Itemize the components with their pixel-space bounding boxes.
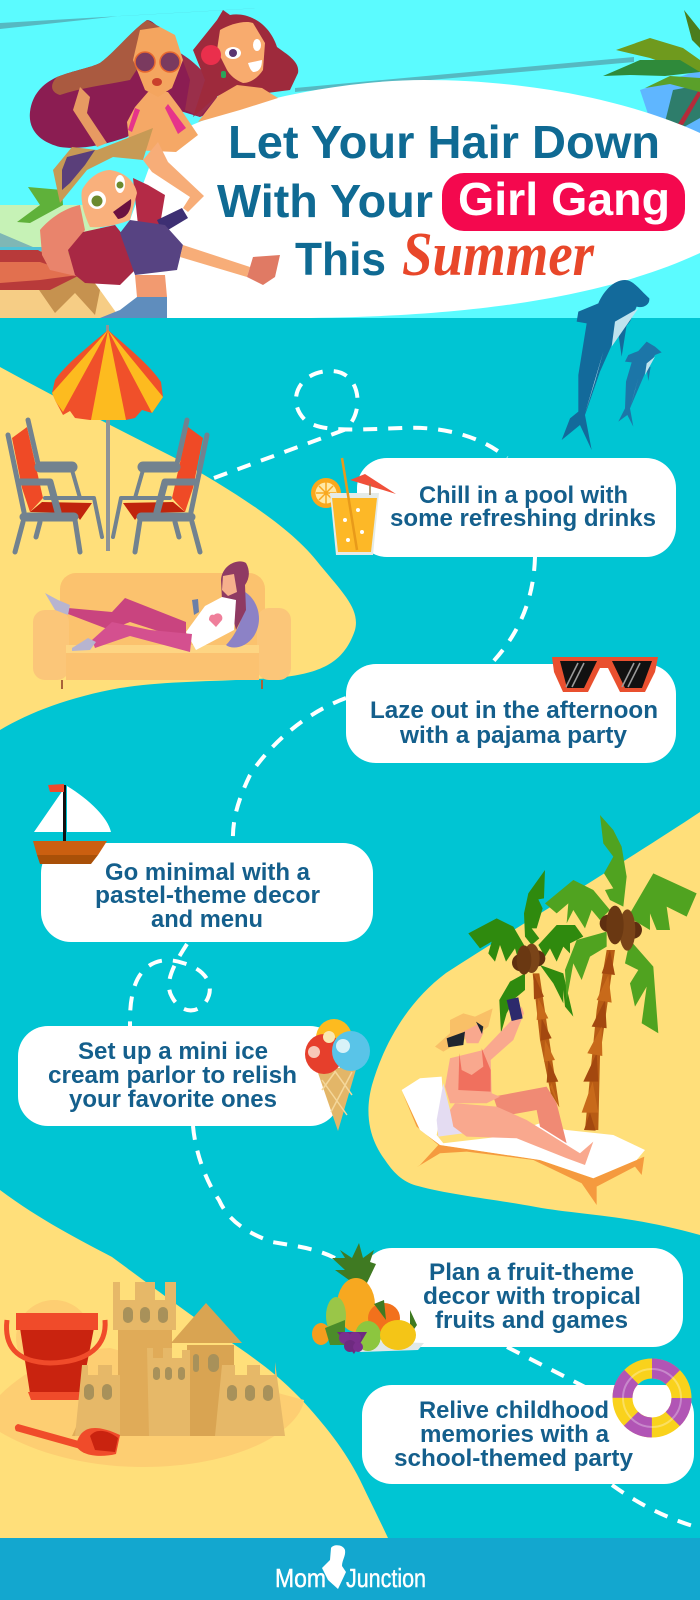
icon: right chair bbox=[113, 420, 207, 552]
icon: palm tree top right bbox=[603, 10, 700, 127]
beach: right bbox=[368, 812, 700, 1235]
icon: sand castle bbox=[72, 1282, 285, 1436]
card 6 text bbox=[394, 1397, 634, 1472]
lower body bbox=[450, 1103, 593, 1165]
icon: ice cream bbox=[305, 1019, 370, 1131]
swimsuit bbox=[458, 1048, 491, 1092]
header sky bbox=[0, 0, 700, 318]
arm raised bbox=[143, 142, 204, 212]
lounger mat bbox=[402, 1077, 645, 1178]
phone arm bbox=[192, 599, 199, 615]
mound of sand bbox=[0, 1348, 304, 1467]
card 3 text bbox=[95, 859, 320, 933]
belly bbox=[135, 275, 167, 297]
logo text: Mom bbox=[275, 1563, 326, 1593]
card 6 text: memories with a bbox=[420, 1421, 610, 1448]
lounger frame bbox=[403, 1093, 644, 1205]
card 6 text: Relive childhood bbox=[419, 1397, 609, 1424]
card 3 text: and menu bbox=[151, 906, 263, 933]
shirt bbox=[186, 597, 236, 650]
card 5 bbox=[362, 1248, 683, 1347]
logo mark bbox=[322, 1545, 346, 1589]
card 2 text bbox=[370, 697, 658, 749]
socks bbox=[45, 593, 96, 651]
hair bbox=[221, 561, 249, 630]
beach: top left bbox=[0, 367, 356, 730]
flowing hair bbox=[0, 250, 80, 290]
icon: red spade bbox=[15, 1424, 120, 1456]
girl with sunglasses bbox=[30, 20, 217, 152]
card 5 text: fruits and games bbox=[435, 1307, 628, 1334]
card 3 text: pastel-theme decor bbox=[95, 882, 320, 909]
pillow bbox=[226, 592, 259, 648]
sea band below header bbox=[0, 318, 700, 322]
card 1 text: some refreshing drinks bbox=[390, 505, 656, 532]
circle behind bucket bbox=[16, 1300, 92, 1376]
sleeve bbox=[157, 208, 188, 233]
icon: beach umbrella bbox=[52, 325, 163, 551]
pajama legs bbox=[68, 598, 186, 640]
card 4 text: Set up a mini ice bbox=[78, 1038, 268, 1065]
card 6 bbox=[362, 1385, 694, 1484]
face bbox=[81, 170, 137, 227]
illustration: three girls bbox=[0, 10, 298, 318]
palm tree right bbox=[545, 815, 697, 1131]
title line 2: With Your bbox=[217, 175, 433, 227]
sofa bbox=[33, 573, 291, 689]
beach: bottom left bbox=[0, 1190, 388, 1538]
girl with straw hat bbox=[0, 128, 280, 318]
highlighted pill: Girl Gang bbox=[458, 173, 670, 225]
title line 1: Let Your Hair Down bbox=[228, 116, 660, 168]
top bbox=[120, 220, 183, 275]
torso and arm bbox=[445, 1007, 524, 1103]
card 4 text: your favorite ones bbox=[69, 1086, 277, 1113]
script word summer: Summer bbox=[402, 221, 595, 289]
icon: juice glass bbox=[311, 458, 396, 555]
shorts bbox=[100, 297, 167, 318]
card 5 text: Plan a fruit-theme bbox=[429, 1259, 634, 1286]
icon: swim ring bbox=[622, 1368, 682, 1428]
momjunction logo bbox=[275, 1545, 426, 1593]
shawl bbox=[37, 240, 100, 315]
icon: sunglasses bbox=[552, 657, 658, 692]
title bbox=[217, 116, 685, 289]
card 4 bbox=[18, 1026, 340, 1126]
white title surfboard shape bbox=[95, 80, 700, 318]
palm tree left bbox=[468, 870, 583, 1107]
momjunction logo: Junction bbox=[346, 1563, 426, 1593]
icon: sailboat bbox=[33, 784, 111, 864]
card 2 bbox=[346, 664, 676, 763]
card 3 bbox=[41, 843, 373, 942]
card 2 text: with a pajama party bbox=[399, 722, 628, 749]
hair bbox=[447, 1022, 483, 1047]
card 6 text: school-themed party bbox=[394, 1445, 634, 1472]
card 5 text: decor with tropical bbox=[423, 1283, 641, 1310]
hat bbox=[53, 128, 153, 203]
illustration: girl on sofa bbox=[33, 561, 291, 689]
card 4 text: cream parlor to relish bbox=[48, 1062, 297, 1089]
icon: red bucket bbox=[7, 1313, 105, 1400]
girl with red flower bbox=[193, 10, 298, 122]
card 5 text bbox=[423, 1259, 641, 1334]
icon: big dolphin bbox=[562, 280, 649, 450]
palm leaf bbox=[17, 187, 63, 223]
towel bbox=[437, 1083, 463, 1137]
phone bbox=[507, 997, 523, 1021]
icon: fruit basket bbox=[312, 1243, 424, 1354]
icon: left chair bbox=[8, 420, 102, 552]
card 3 text: Go minimal with a bbox=[105, 859, 311, 886]
card 2 text: Laze out in the afternoon bbox=[370, 697, 658, 724]
card 1 bbox=[357, 458, 676, 557]
red hair mass bbox=[68, 225, 135, 285]
footer bar bbox=[0, 1538, 700, 1600]
dashed route bbox=[130, 371, 700, 1528]
title line 3: This bbox=[295, 233, 386, 285]
icon: small dolphin bbox=[618, 342, 662, 427]
face bbox=[222, 574, 237, 596]
card 4 text bbox=[48, 1038, 297, 1113]
face bbox=[463, 1023, 483, 1043]
hair pink bbox=[40, 205, 85, 277]
card 1 text bbox=[390, 482, 656, 532]
upper leg bbox=[493, 1087, 567, 1143]
arm to hand bbox=[180, 245, 250, 277]
illustration: woman on lounger bbox=[402, 997, 645, 1205]
card 1 text: Chill in a pool with bbox=[419, 482, 628, 509]
hat bbox=[435, 1008, 493, 1052]
